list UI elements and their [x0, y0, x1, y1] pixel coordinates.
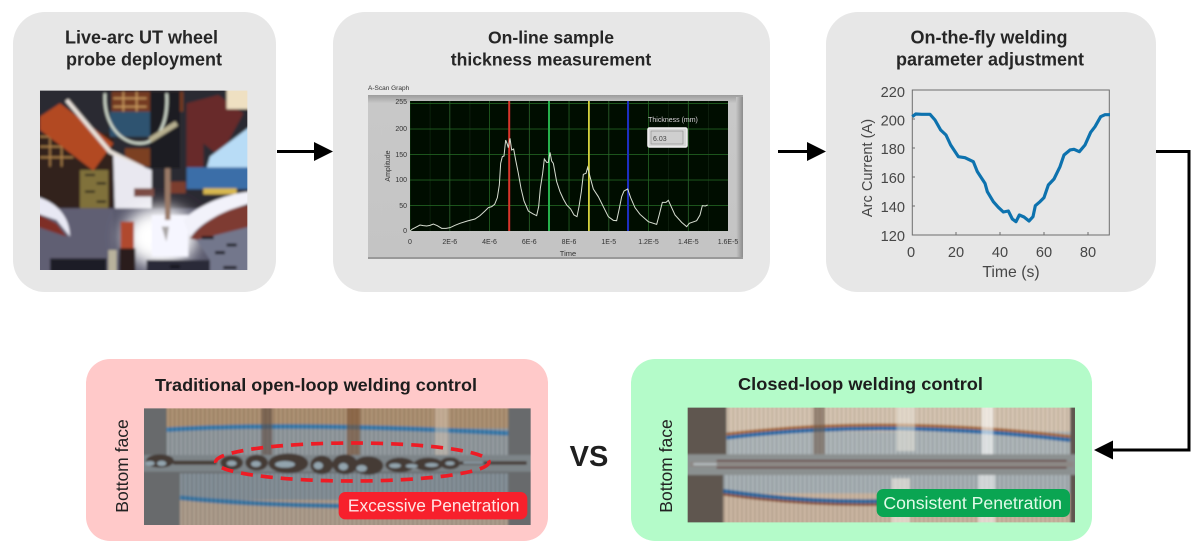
axis tick labels: 1.6E-5 [718, 239, 738, 246]
panel: closed-loop welding control [631, 359, 1092, 541]
arrow: deployment to measurement [277, 142, 333, 161]
data line: amplitude [410, 138, 708, 231]
heading: probe deployment: Live-arc UT wheel [65, 28, 218, 48]
axis tick labels: 4E-6 [482, 239, 497, 246]
heading: thickness measurement: thickness measurement [451, 50, 651, 70]
heading: probe deployment: probe deployment [66, 50, 222, 70]
axis tick labels: 1.4E-5 [678, 239, 699, 246]
axis tick labels: 255 [395, 99, 407, 106]
panel: on-line sample thickness measurement [333, 12, 770, 292]
heading: open-loop: Traditional open-loop welding control [155, 375, 477, 395]
readout: thickness: 6.03 [653, 136, 667, 143]
text: versus: VS [570, 441, 608, 473]
axis tick labels: 1.2E-5 [638, 239, 659, 246]
heading: closed-loop: Closed-loop welding control [738, 374, 983, 394]
axis label: bottom face: Bottom face [656, 419, 676, 513]
axis tick labels: 2E-6 [442, 239, 457, 246]
axis tick labels: 60 [1036, 245, 1052, 261]
axis tick labels: 40 [992, 245, 1008, 261]
chart: A-Scan graph [368, 85, 743, 259]
axis tick labels: 6E-6 [522, 239, 537, 246]
chart: arc current over time [860, 85, 1110, 281]
axis tick labels: 80 [1080, 245, 1096, 261]
chart: A-Scan graph: A-Scan Graph [368, 85, 410, 92]
heading: thickness measurement: On-line sample [488, 28, 614, 48]
arrow: adjustment feedback to closed-loop control [1094, 152, 1189, 460]
readout: thickness: Thickness (mm) [648, 117, 698, 124]
axis tick labels: 200 [395, 126, 407, 133]
heading: parameter adjustment: parameter adjustment [896, 50, 1084, 70]
data line: arc current [912, 114, 1110, 222]
photo: robot welding cell [37, 87, 251, 273]
axis tick labels: 200 [881, 114, 905, 130]
axis tick labels: 8E-6 [562, 239, 576, 246]
panel: on-the-fly welding parameter adjustment [826, 12, 1156, 292]
axis tick labels: 120 [881, 229, 905, 245]
axis tick labels: 50 [399, 203, 407, 210]
label: consistent penetration [877, 489, 1070, 517]
axis tick labels: Time (s) [982, 264, 1040, 281]
arrow: measurement to adjustment [778, 142, 826, 161]
axis tick labels: 1E-5 [601, 239, 616, 246]
label: excessive penetration [339, 492, 527, 519]
axis tick labels: 100 [395, 177, 407, 184]
axis tick labels: Arc Current (A) [860, 119, 876, 217]
axis tick labels [860, 85, 1096, 281]
axis label: bottom face: Bottom face [112, 419, 132, 513]
panel: traditional open-loop welding control [86, 359, 548, 541]
panel: live-arc UT wheel probe deployment [13, 12, 276, 292]
axis tick labels: Time [560, 249, 576, 258]
photo: weld with consistent penetration [684, 404, 1078, 526]
axis tick labels: 0 [403, 228, 407, 235]
photo: weld with excessive penetration [141, 405, 534, 528]
axis tick labels: 150 [395, 152, 407, 159]
axis tick labels: 160 [881, 171, 905, 187]
axis tick labels [385, 99, 738, 258]
axis tick labels: Amplitude [385, 150, 392, 182]
axis tick labels: 20 [948, 245, 964, 261]
readout: thickness [648, 117, 698, 147]
axis tick labels: 0 [907, 245, 915, 261]
label: excessive penetration: Excessive Penetration [348, 495, 519, 515]
heading: parameter adjustment: On-the-fly welding [910, 28, 1068, 48]
axis tick labels: 0 [408, 239, 412, 246]
axis tick labels: 140 [881, 200, 905, 216]
axis tick labels: 180 [881, 142, 905, 158]
label: consistent penetration: Consistent Penetration [883, 493, 1062, 513]
axis tick labels: 220 [881, 85, 905, 101]
